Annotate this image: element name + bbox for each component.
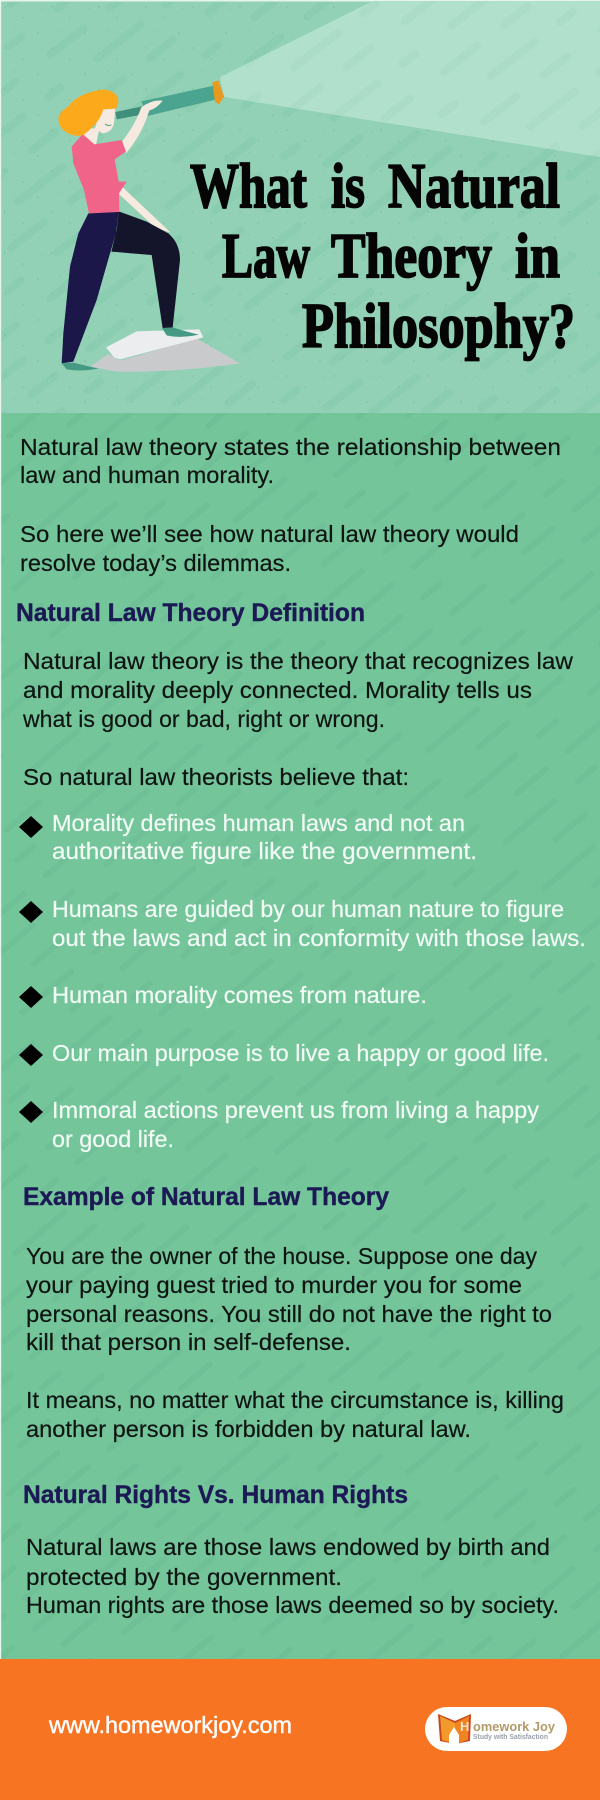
- panel: footer: [0, 1659, 600, 1800]
- text block: definition: what is good or bad, right or wrong.: [22, 706, 385, 732]
- logo letter H: H: [460, 1719, 469, 1734]
- icon: front leg: [111, 211, 180, 328]
- heading: rights: Natural Rights Vs. Human Rights: [23, 1481, 408, 1509]
- text block: example: [26, 1243, 564, 1442]
- bullet 1: Morality defines human laws and not an: [52, 810, 465, 836]
- light beam from telescope: [220, 1, 600, 157]
- icon: back shoe: [62, 363, 99, 371]
- text block: introduction: [20, 434, 561, 576]
- title: Theory: [331, 221, 492, 291]
- logo: Homework Joy: [425, 1707, 567, 1751]
- text block: example: You are the owner of the house. Suppose one day: [26, 1243, 537, 1269]
- icon: smile: [105, 124, 111, 126]
- icon: face: [95, 107, 115, 133]
- logo text: [473, 1719, 556, 1741]
- text block: introduction: resolve today’s dilemmas.: [20, 550, 291, 576]
- title: What: [190, 151, 307, 221]
- icon: neck: [82, 128, 99, 145]
- title: in: [515, 221, 560, 291]
- bullet 4: Our main purpose is to live a happy or good life.: [52, 1040, 549, 1066]
- text block: definition: and morality deeply connected. Morality tells us: [23, 677, 532, 703]
- icon: raised arm: [122, 100, 163, 153]
- text block: example: your paying guest tried to murder you for some: [26, 1272, 522, 1298]
- bullet 2: [19, 896, 586, 951]
- title: Law: [222, 221, 310, 291]
- bullet list: beliefs: [19, 810, 586, 1152]
- bullet 5: Immoral actions prevent us from living a happy: [52, 1097, 540, 1123]
- heading: definition: Natural Law Theory Definition: [16, 599, 365, 627]
- text block: introduction: law and human morality.: [20, 462, 274, 488]
- panel: hero background: [0, 0, 600, 413]
- text block: example: kill that person in self-defense.: [26, 1329, 351, 1355]
- bullet 2: out the laws and act in conformity with those laws.: [52, 925, 586, 951]
- text block: example: It means, no matter what the circumstance is, killing: [26, 1387, 564, 1413]
- title: [190, 151, 575, 361]
- text block: rights: Human rights are those laws deemed so by society.: [26, 1592, 559, 1618]
- text block: introduction: Natural law theory states the relationship between: [20, 434, 561, 460]
- text block: rights: Natural laws are those laws endowed by birth and: [26, 1534, 550, 1560]
- bullet 2: Humans are guided by our human nature to figure: [52, 896, 564, 922]
- text block: definition: So natural law theorists believe that:: [23, 764, 409, 790]
- title: is: [331, 151, 365, 221]
- text block: rights: protected by the government.: [26, 1564, 342, 1590]
- icon: open book with pencil: [438, 1714, 471, 1746]
- text block: example: another person is forbidden by natural law.: [26, 1416, 471, 1442]
- icon: hair: [58, 89, 118, 136]
- icon: lower arm: [117, 186, 171, 233]
- text block: introduction: So here we’ll see how natural law theory would: [20, 521, 519, 547]
- logo text: omework Joy: [473, 1719, 556, 1734]
- bullet 1: [19, 810, 477, 864]
- bullet 3: Human morality comes from nature.: [52, 982, 427, 1008]
- website url: www.homeworkjoy.com: [48, 1712, 292, 1738]
- text block: definition: [22, 648, 573, 790]
- icon: back leg: [62, 211, 119, 363]
- bullet 5: or good life.: [52, 1126, 174, 1152]
- title: Natural: [388, 151, 560, 221]
- bullet 1: authoritative figure like the government.: [52, 838, 477, 864]
- icon: front shoe: [162, 327, 199, 337]
- text block: example: personal reasons. You still do not have the right to: [26, 1301, 552, 1327]
- heading: example: Example of Natural Law Theory: [23, 1183, 389, 1211]
- icon: telescope: [115, 80, 224, 119]
- icon: rock: [90, 329, 240, 372]
- illustration: woman looking through telescope on rock: [58, 80, 240, 372]
- logo text: Study with Satisfaction: [473, 1734, 548, 1741]
- text block: rights: [26, 1534, 559, 1618]
- text block: definition: Natural law theory is the theory that recognizes law: [23, 648, 573, 674]
- bullet 5: [19, 1097, 540, 1152]
- icon: shirt: [72, 134, 127, 213]
